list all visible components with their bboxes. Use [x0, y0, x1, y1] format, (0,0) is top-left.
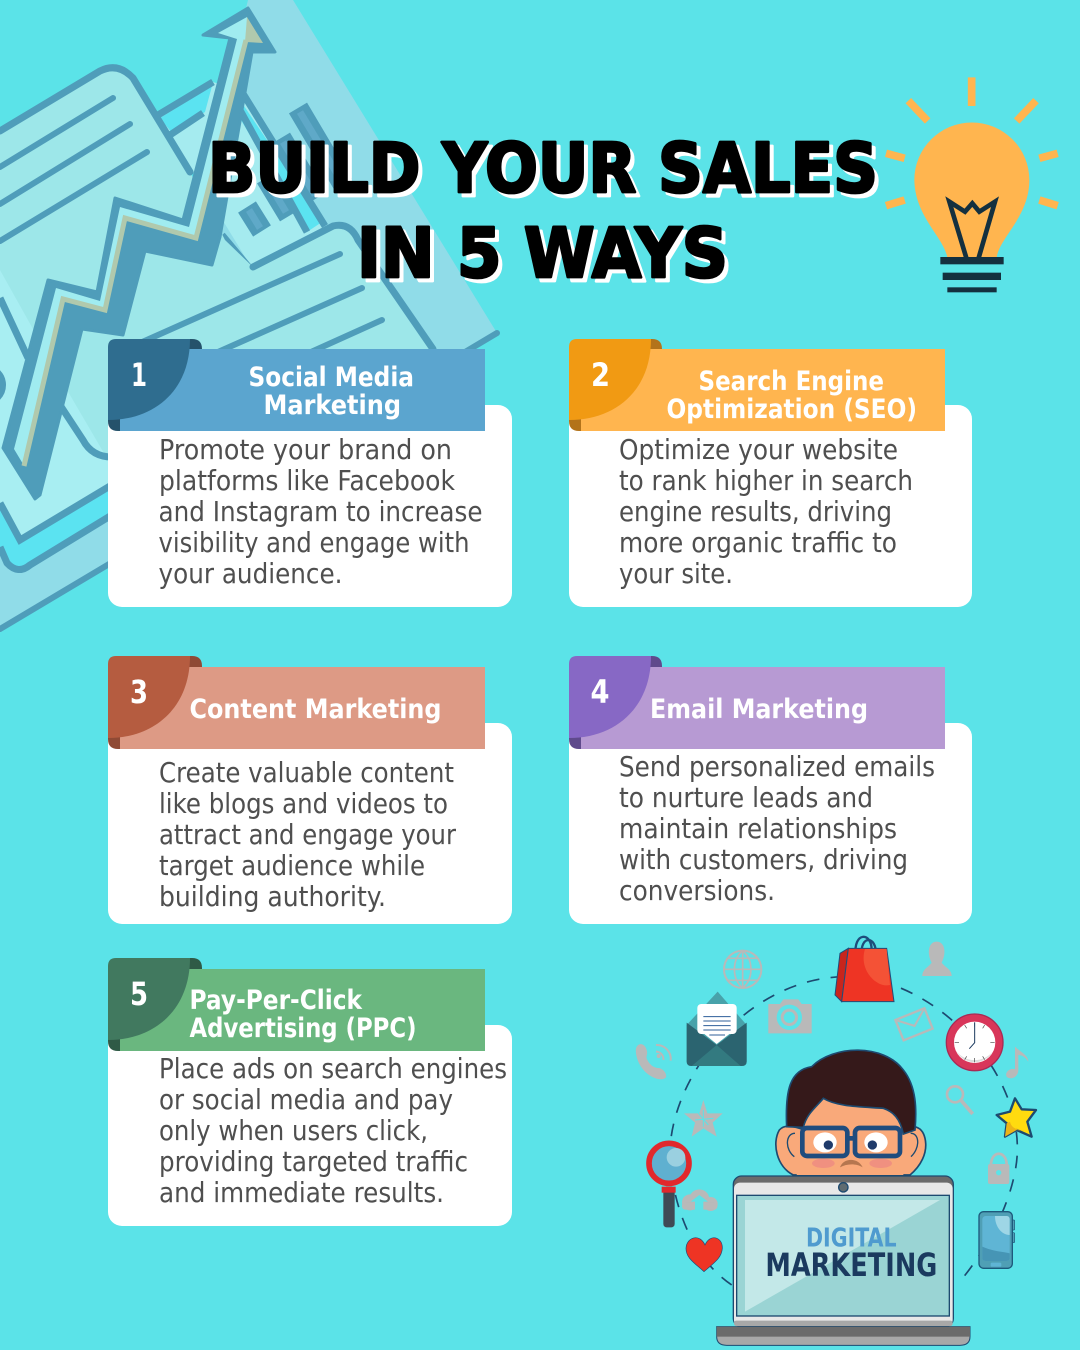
panel: 4 email marketing: with customers, driving — [619, 844, 908, 876]
panel: 5 pay-per-click advertising: or social media and pay — [159, 1084, 453, 1116]
panel: 5 pay-per-click advertising: and immediate results. — [159, 1177, 444, 1209]
panel: 2 search engine optimization: your site. — [619, 558, 733, 590]
icon: envelope with letter — [687, 992, 747, 1066]
panel: 4 email marketing: maintain relationships — [619, 813, 897, 845]
panel: 1 social media marketing — [108, 339, 512, 607]
laptop: DIGITAL — [806, 1223, 897, 1253]
panel: 1 social media marketing: 1 — [131, 356, 147, 394]
panel: 3 content marketing: Create valuable content — [159, 757, 454, 789]
panel: 1 social media marketing: Marketing — [264, 390, 401, 421]
panel: 1 social media marketing: visibility and engage with — [158, 527, 470, 559]
title — [208, 129, 882, 298]
person — [776, 1050, 926, 1175]
title: BUILD YOUR SALES — [212, 133, 882, 213]
title: IN 5 WAYS — [357, 214, 728, 294]
panel: 4 email marketing: 4 — [590, 673, 610, 711]
panel: 5 pay-per-click advertising: 5 — [130, 975, 148, 1013]
title: IN 5 WAYS — [361, 218, 732, 298]
laptop: MARKETING — [765, 1246, 937, 1284]
panel: 1 social media marketing: Social Media — [248, 362, 414, 393]
icon: light bulb — [886, 77, 1058, 292]
panel: 2 search engine optimization: Optimization (SEO) — [666, 394, 917, 425]
icon: heart — [686, 1238, 722, 1272]
panel: 2 search engine optimization: Search Engine — [698, 366, 884, 397]
icon: clock — [946, 1014, 1003, 1071]
panel: 2 search engine optimization: engine results, driving — [619, 496, 892, 528]
panel: 2 search engine optimization: Optimize your website — [619, 434, 898, 466]
panel: 5 pay-per-click advertising: Pay-Per-Click — [190, 985, 363, 1016]
panel: 2 search engine optimization — [569, 339, 972, 607]
title: BUILD YOUR SALES — [208, 129, 878, 209]
panel: 3 content marketing: attract and engage your — [159, 819, 457, 851]
panel: 1 social media marketing: and Instagram to increase — [158, 496, 482, 528]
panel: 3 content marketing — [108, 656, 512, 924]
panel: 2 search engine optimization: more organic traffic to — [619, 527, 897, 559]
icon: star — [997, 1098, 1036, 1137]
panel: 3 content marketing: 3 — [130, 673, 148, 711]
panel: 4 email marketing — [569, 656, 972, 924]
panel: 1 social media marketing: your audience. — [158, 558, 342, 590]
panel: 2 search engine optimization: to rank higher in search — [619, 465, 913, 497]
panel: 5 pay-per-click advertising: only when users click, — [159, 1115, 428, 1147]
panel: 3 content marketing: like blogs and videos to — [159, 788, 448, 820]
background illustration: growth chart on documents — [0, 0, 497, 630]
illustration: digital marketing person with laptop and icons — [636, 937, 1036, 1345]
panel: 1 social media marketing: Promote your brand on — [159, 434, 452, 466]
icon: smartphone — [979, 1212, 1015, 1268]
panel: 3 content marketing: target audience while — [159, 850, 425, 882]
icon: magnifier — [649, 1143, 689, 1227]
panel: 3 content marketing: Content Marketing — [190, 694, 442, 725]
panel: 4 email marketing: Send personalized emails — [619, 751, 935, 783]
panel: 5 pay-per-click advertising: providing targeted traffic — [159, 1146, 468, 1178]
panel: 5 pay-per-click advertising: Place ads on search engines — [159, 1053, 507, 1085]
panel: 4 email marketing: to nurture leads and — [619, 782, 873, 814]
icon: shopping bag — [835, 937, 894, 1002]
panel: 3 content marketing: building authority. — [159, 881, 386, 913]
panel: 5 pay-per-click advertising: Advertising (PPC) — [190, 1013, 416, 1044]
laptop — [717, 1176, 970, 1345]
panel: 4 email marketing: conversions. — [619, 875, 775, 907]
panel: 5 pay-per-click advertising — [108, 958, 512, 1226]
panel: 1 social media marketing: platforms like Facebook — [159, 465, 455, 497]
panel: 4 email marketing: Email Marketing — [650, 694, 868, 725]
panel: 2 search engine optimization: 2 — [591, 356, 610, 394]
